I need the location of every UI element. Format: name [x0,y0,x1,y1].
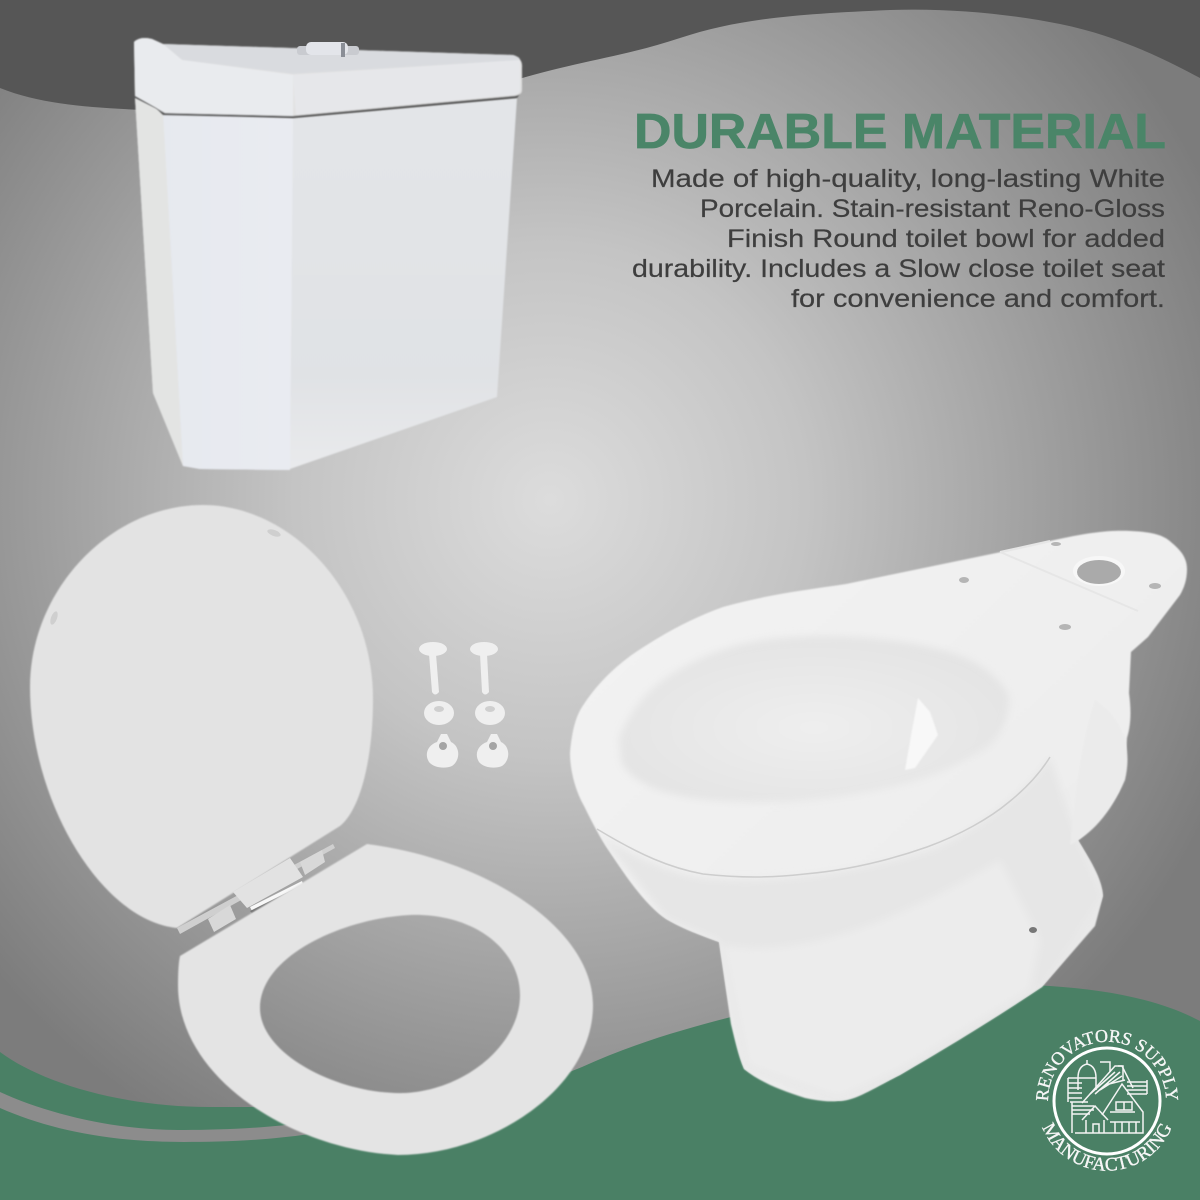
logo text bottom: MANUFACTURING [1042,1122,1171,1172]
toilet seat ring [178,844,593,1155]
top dark wave [0,0,1200,115]
tank deck line [1000,541,1138,611]
trapway bump [1070,700,1127,845]
bowl silhouette [570,531,1187,1101]
hardware: bolts, washers, nuts [419,642,508,768]
seat cover [30,505,373,928]
bowl lower shading [621,840,1103,1102]
bowl shading clipped to silhouette [621,840,1103,1102]
nut 1 [427,734,458,768]
tank lid [134,38,522,118]
logo: renovators supply manufacturing [1036,1030,1178,1172]
water inlet hole [1073,556,1125,586]
bottom green wave [0,985,1200,1200]
washer 1 [424,701,454,725]
rim front line [597,757,1050,877]
logo house [1068,1060,1147,1133]
toilet bowl [570,531,1187,1101]
interior highlight [905,698,938,770]
flush button [297,42,359,57]
description text block: Porcelain. Stain-resistant Reno-Gloss [700,195,1165,223]
washer 2 [475,701,505,725]
description text block: Made of high-quality, long-lasting White [651,165,1165,193]
description text block: durability. Includes a Slow close toilet seat [632,255,1165,283]
tank body [135,98,517,470]
description text block [632,165,1165,313]
logo text top: RENOVATORS SUPPLY [1036,1030,1178,1101]
nut 2 [477,734,508,768]
bolt holes [959,542,1161,933]
logo ring [1054,1048,1160,1154]
pedestal shading [722,860,1040,1098]
description text block: Finish Round toilet bowl for added [727,225,1165,253]
description text block: for convenience and comfort. [791,285,1165,313]
heading: durable material: DURABLE MATERIAL [634,105,1166,159]
lid notches [49,528,282,626]
bolt 1 [419,642,447,694]
bolt 2 [470,642,498,694]
bowl interior [619,636,1009,802]
toilet tank [134,38,522,470]
toilet seat lid [30,505,373,934]
grey accent stripe [0,1092,310,1142]
hinge [177,844,335,934]
